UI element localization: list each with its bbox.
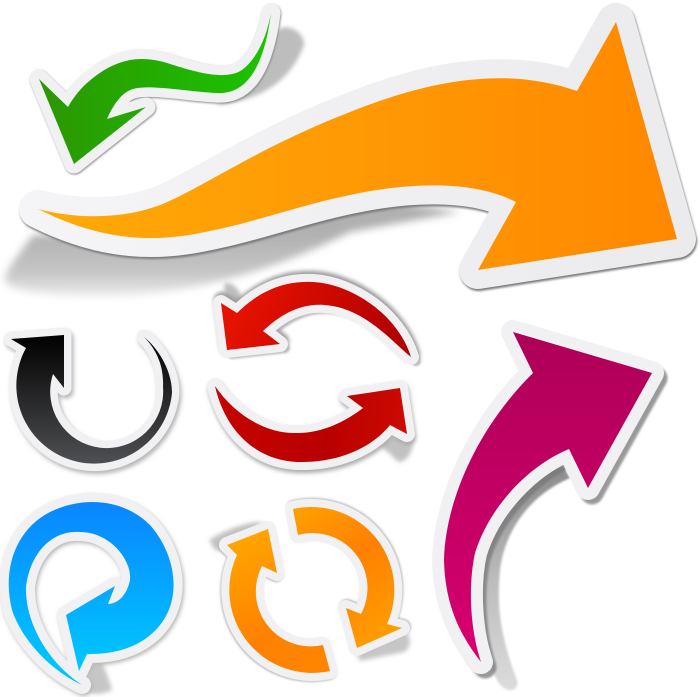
- icon: red arrow pointing right: [215, 386, 413, 465]
- icon: black circular arrow: [11, 335, 174, 467]
- left arrow: [226, 529, 330, 674]
- right arrow: [293, 506, 403, 648]
- icon: magenta curved arrow: [444, 332, 656, 690]
- icon: green wavy arrow: [39, 13, 304, 165]
- icon: large orange wavy arrow: [5, 22, 678, 296]
- icon: blue spiral arrow: [9, 502, 175, 694]
- icon: orange cycle arrows: [209, 506, 410, 674]
- icon: red arrow pointing left: [221, 279, 416, 361]
